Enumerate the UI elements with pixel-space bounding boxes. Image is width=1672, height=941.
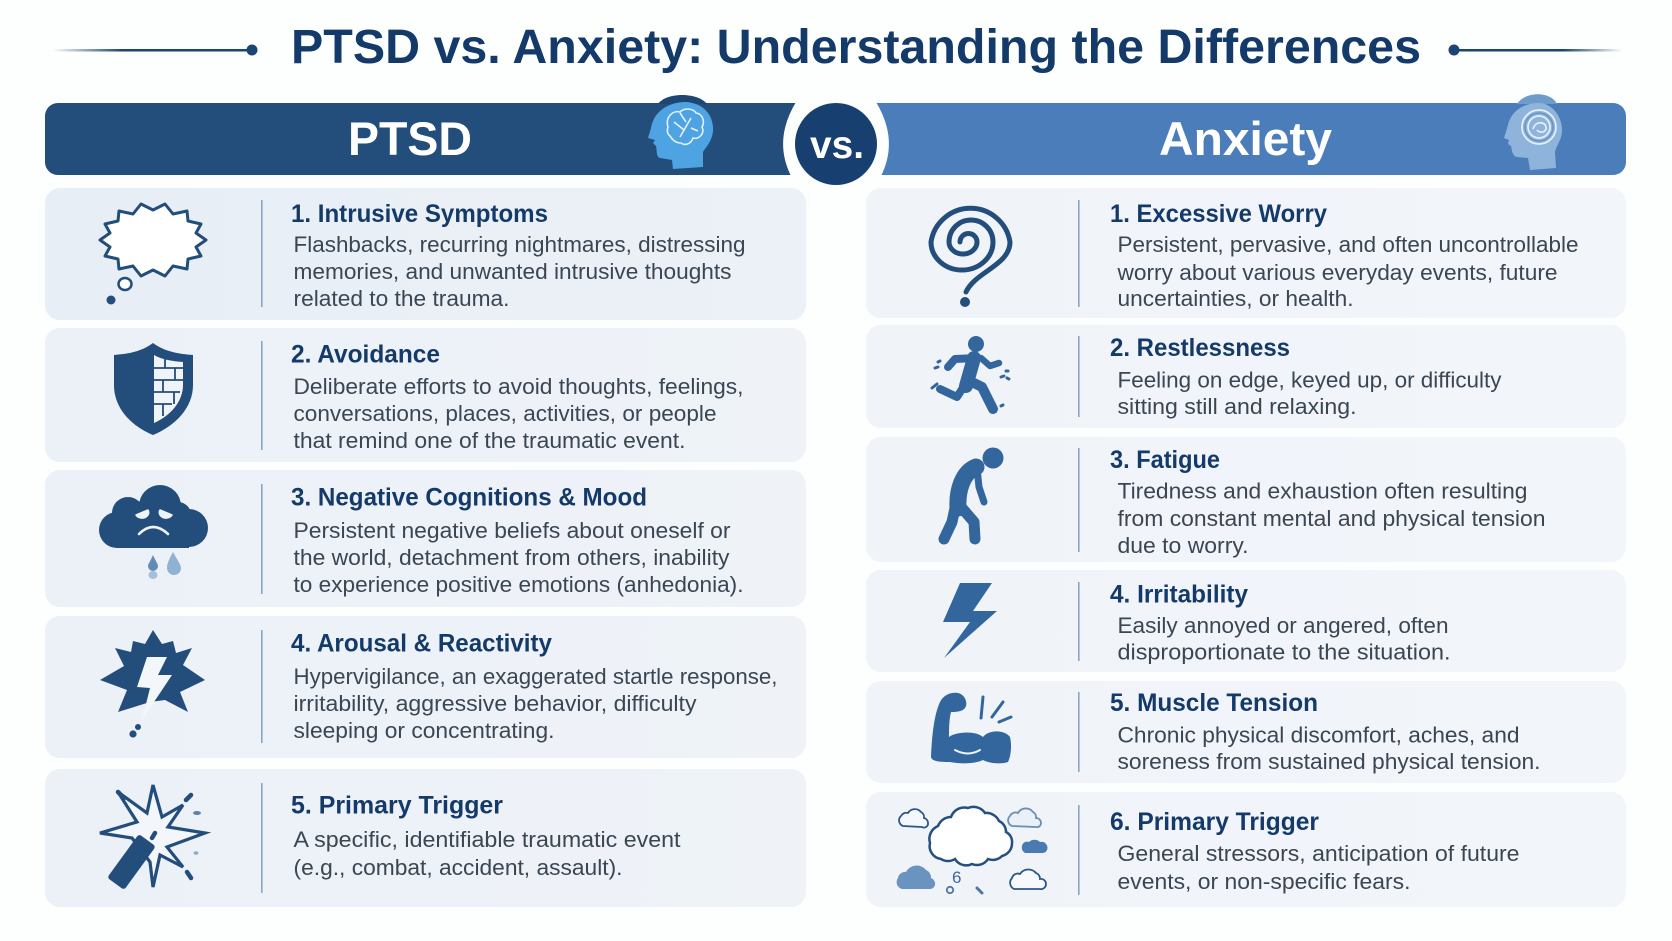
description	[1118, 841, 1520, 894]
description	[1118, 478, 1546, 558]
vs. badge: vs.	[810, 124, 864, 167]
description: Persistent, pervasive, and often uncontrollable	[1118, 232, 1578, 257]
description: disproportionate to the situation.	[1118, 640, 1450, 664]
description: related to the trauma.	[294, 286, 510, 311]
card: Primary Trigger (PTSD)	[45, 769, 806, 907]
card: Avoidance	[45, 328, 806, 462]
card: Muscle Tension	[866, 681, 1626, 783]
icon: cluster of clouds: 6	[952, 868, 961, 887]
description: to experience positive emotions (anhedonia).	[294, 572, 744, 597]
description: that remind one of the traumatic event.	[294, 428, 686, 453]
icon: running figure	[932, 336, 1009, 409]
description: worry about various everyday events, future	[1116, 260, 1558, 285]
heading: 2. Avoidance	[291, 340, 440, 368]
heading: 1. Intrusive Symptoms	[291, 200, 548, 228]
card: Fatigue	[866, 437, 1626, 562]
card: Intrusive Symptoms	[45, 188, 806, 320]
vs. badge	[783, 102, 889, 185]
icon: Anxiety head with brain	[1504, 94, 1562, 170]
icon: explosion	[100, 785, 205, 890]
icon: PTSD head with brain	[648, 95, 713, 169]
heading: 5. Muscle Tension	[1110, 689, 1318, 717]
heading: 4. Arousal & Reactivity	[291, 630, 552, 658]
Anxiety header label: Anxiety	[1159, 112, 1332, 165]
description: Easily annoyed or angered, often	[1118, 613, 1448, 638]
panel: Anxiety column	[866, 188, 1626, 907]
description: the world, detachment from others, inability	[294, 545, 730, 570]
icon: cluster of clouds	[897, 807, 1047, 893]
description: soreness from sustained physical tension.	[1118, 749, 1540, 774]
description: Deliberate efforts to avoid thoughts, feelings,	[294, 374, 744, 399]
PTSD header bar	[45, 103, 815, 175]
icon: burst with lightning	[100, 630, 205, 738]
description	[1118, 368, 1502, 419]
heading: 5. Primary Trigger	[291, 792, 503, 820]
description	[294, 664, 778, 743]
description	[1116, 232, 1578, 311]
description: uncertainties, or health.	[1118, 286, 1354, 311]
icon: spiral question mark	[931, 208, 1010, 307]
description: sitting still and relaxing.	[1118, 394, 1356, 419]
heading: 6. Primary Trigger	[1110, 808, 1319, 836]
card: Negative Cognitions & Mood	[45, 470, 806, 607]
icon: shield with wall	[114, 343, 193, 435]
card: Excessive Worry	[866, 188, 1626, 318]
description: due to worry.	[1118, 533, 1248, 558]
icon: lightning bolt	[943, 583, 997, 658]
description: Persistent negative beliefs about oneself or	[294, 518, 731, 543]
heading: 3. Fatigue	[1110, 446, 1220, 474]
description: A specific, identifiable traumatic event	[294, 827, 681, 852]
description: Hypervigilance, an exaggerated startle response,	[294, 664, 778, 689]
description	[294, 518, 744, 597]
panel: PTSD column	[45, 188, 806, 907]
description: Chronic physical discomfort, aches, and	[1118, 723, 1520, 748]
heading: 1. Excessive Worry	[1110, 200, 1327, 228]
heading: 2. Restlessness	[1110, 334, 1290, 362]
description: Flashbacks, recurring nightmares, distressing	[294, 232, 746, 257]
heading: 4. Irritability	[1110, 580, 1248, 608]
description	[294, 232, 746, 311]
card: Irritability	[866, 570, 1626, 672]
card: Arousal & Reactivity	[45, 616, 806, 758]
description: (e.g., combat, accident, assault).	[294, 855, 622, 880]
description: sleeping or concentrating.	[294, 718, 554, 743]
description: from constant mental and physical tension	[1118, 506, 1546, 531]
icon: sad rain cloud	[99, 485, 208, 579]
icon: slumped figure	[944, 448, 1004, 539]
description: Feeling on edge, keyed up, or difficulty	[1118, 368, 1502, 392]
description	[294, 374, 744, 453]
description	[294, 827, 681, 880]
icon: flexed arm	[931, 693, 1011, 763]
title: PTSD vs. Anxiety: Understanding the Differences	[291, 21, 1421, 74]
card: Primary Trigger (Anxiety)	[866, 792, 1626, 907]
description	[1118, 613, 1450, 664]
description: events, or non-specific fears.	[1118, 869, 1410, 894]
description: Tiredness and exhaustion often resulting	[1118, 478, 1528, 504]
description	[1118, 723, 1540, 774]
PTSD header label: PTSD	[348, 112, 472, 165]
description: memories, and unwanted intrusive thoughts	[294, 259, 732, 284]
icon: thought bubble	[100, 204, 206, 304]
heading: 3. Negative Cognitions & Mood	[291, 484, 647, 512]
Anxiety header bar	[860, 103, 1626, 175]
description: General stressors, anticipation of future	[1118, 841, 1520, 866]
card: Restlessness	[866, 325, 1626, 428]
description: irritability, aggressive behavior, difficulty	[294, 691, 697, 716]
description: conversations, places, activities, or people	[294, 401, 716, 426]
